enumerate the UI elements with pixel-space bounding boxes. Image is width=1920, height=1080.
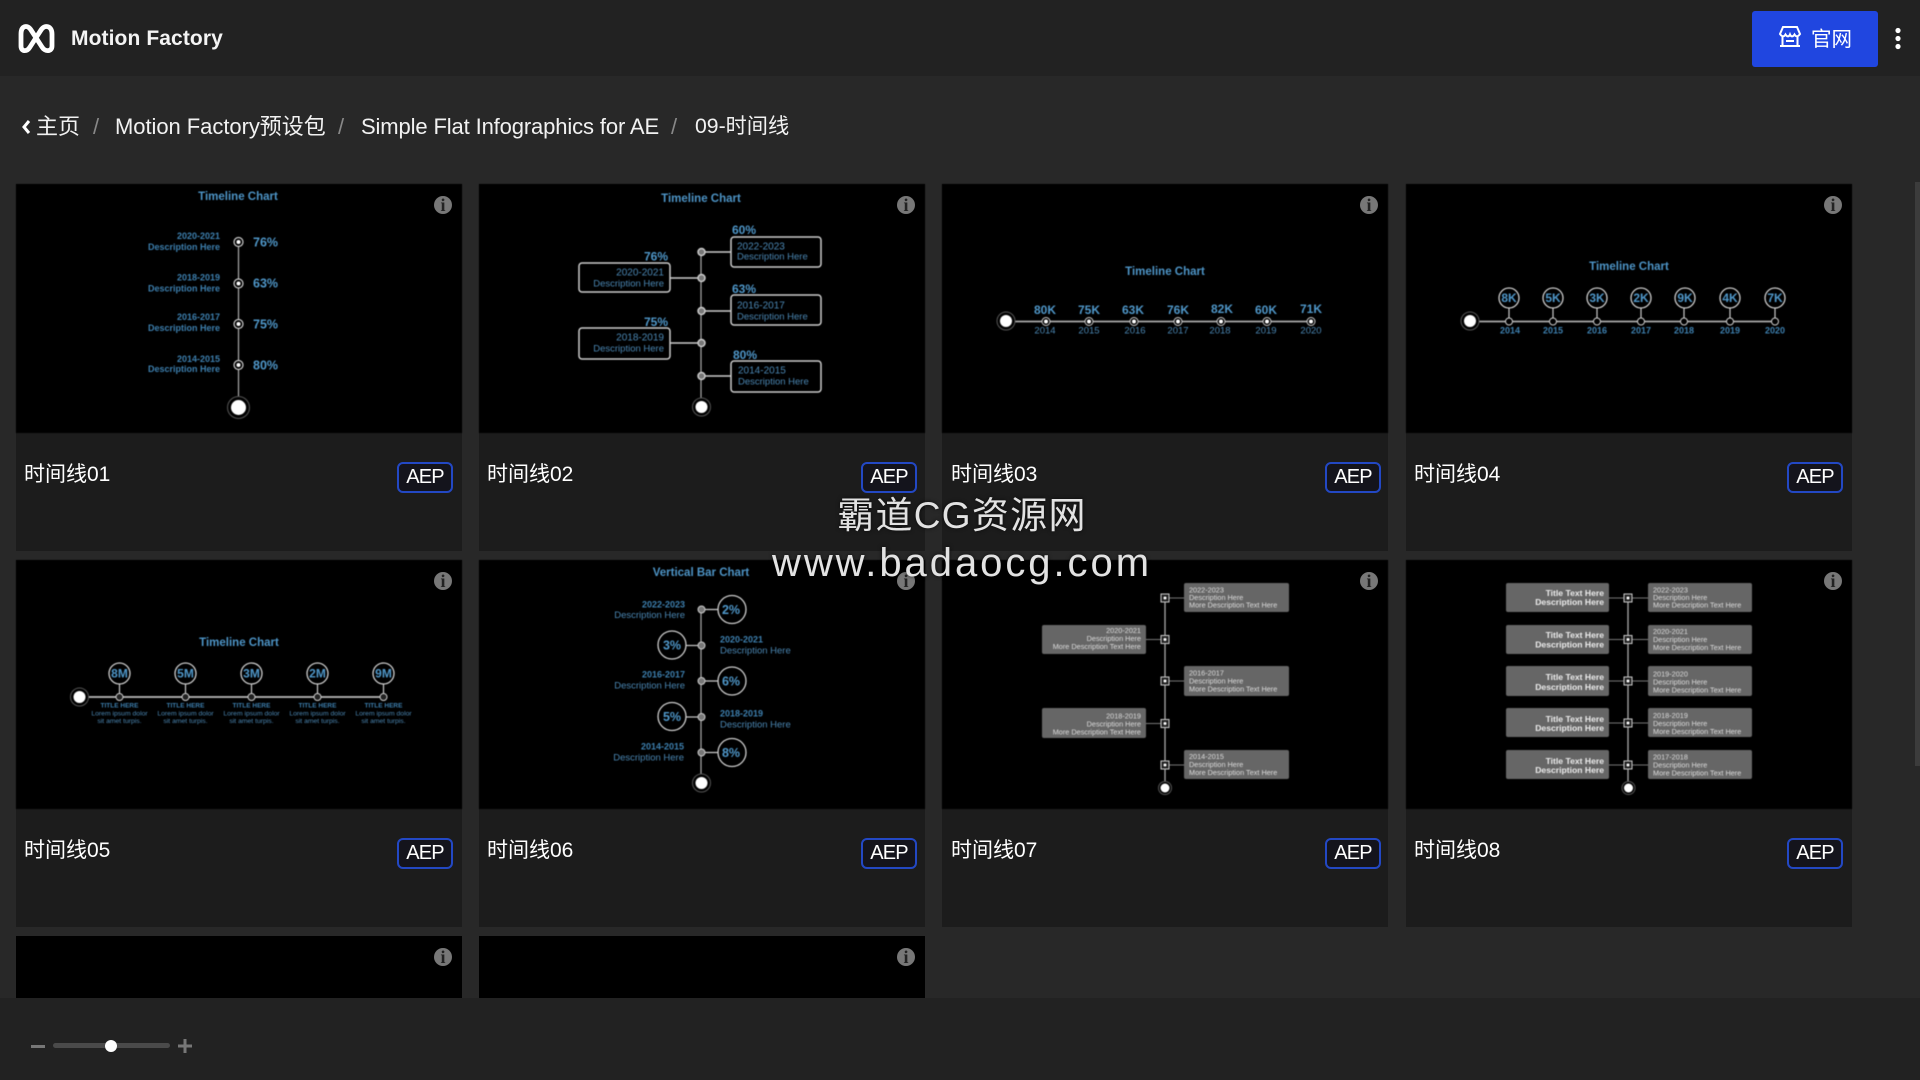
point 2015: 75K <box>1078 303 1100 317</box>
button label: 官网 <box>1811 28 1852 51</box>
watermark line: site name: 霸道CG资源网 <box>837 495 1087 536</box>
point 2016: 2016 <box>1124 326 1146 336</box>
chart title: Vertical Bar Chart <box>653 567 749 579</box>
brand name: Motion Factory <box>71 27 223 50</box>
row 2020-2021: 2020-2021 <box>1653 627 1688 636</box>
row 2020-2021: More Description Text Here <box>1653 643 1741 652</box>
entry 2020-2021: Description Here <box>148 242 220 252</box>
entry 2020-2021: Description Here <box>1087 634 1141 643</box>
icon: info <box>434 572 452 590</box>
row 2018-2019: Description Here <box>1535 723 1604 733</box>
icon: info: i <box>440 195 446 215</box>
point 2017: 2017 <box>1631 326 1651 336</box>
footer zoom bar <box>0 998 1920 1080</box>
point 2018 <box>1674 288 1695 336</box>
zoom out icon <box>31 1045 45 1048</box>
point 2014 <box>1499 288 1520 336</box>
crumb: product: Simple Flat Infographics for AE <box>361 114 659 139</box>
icon: back chevron <box>22 120 30 134</box>
end marker <box>228 396 250 418</box>
point 2019: 60K <box>1255 303 1277 317</box>
point 2019: 4K <box>1722 291 1738 305</box>
item 9M <box>355 663 412 725</box>
entry 2018-2019 <box>148 272 278 294</box>
icon: info <box>897 196 915 214</box>
entry 2014-2015 <box>1161 750 1289 779</box>
icon: info <box>434 948 452 966</box>
entry 2016-2017: 2016-2017 <box>737 300 785 312</box>
point 2015: 5K <box>1545 291 1561 305</box>
entry 2022-2023: Description Here <box>737 252 808 262</box>
item 9M: sit amet turpis. <box>361 718 406 725</box>
icon: info <box>897 948 915 966</box>
entry 2018-2019 <box>1042 708 1169 738</box>
entry 2018-2019: 63% <box>253 276 278 290</box>
entry 2016-2017: Description Here <box>737 312 808 322</box>
item 2M: TITLE HERE <box>299 702 337 710</box>
row 2019-2020 <box>1506 666 1752 696</box>
panel: timeline 06 <box>479 560 925 927</box>
card name: 时间线08 <box>1414 839 1500 862</box>
separator text: / <box>671 114 677 139</box>
AEP badge <box>861 462 917 493</box>
entry 2016-2017: More Description Text Here <box>1189 684 1277 694</box>
panel: timeline 04 <box>1406 184 1852 551</box>
row 2017-2018: Description Here <box>1653 760 1707 770</box>
entry 2014-2015: 2014-2015 <box>177 354 220 364</box>
axis line <box>1627 598 1629 784</box>
chart: grey box timeline 07 <box>942 560 1388 809</box>
zoom in icon <box>178 1039 192 1053</box>
entry 2020-2021 <box>148 231 278 252</box>
axis line <box>1006 320 1311 322</box>
entry 3%: 3% <box>663 638 681 652</box>
entry 2020-2021: 76% <box>253 236 278 250</box>
entry 2018-2019: More Description Text Here <box>1053 728 1141 736</box>
point 2017: 2K <box>1633 291 1649 305</box>
card name: 时间线07 <box>951 839 1037 862</box>
entry 2018-2019: Description Here <box>1087 720 1141 728</box>
chart title: Timeline Chart <box>1589 261 1669 273</box>
card name: 时间线01 <box>24 463 110 486</box>
row 2017-2018: More Description Text Here <box>1653 768 1741 778</box>
row 2022-2023: More Description Text Here <box>1653 600 1741 610</box>
AEP badge <box>1787 462 1843 493</box>
point 2014: 80K <box>1034 303 1056 317</box>
AEP badge <box>861 838 917 869</box>
entry 2016-2017 <box>148 312 278 333</box>
point 2020: 7K <box>1767 291 1783 305</box>
item 5M <box>157 663 214 725</box>
entry 8% <box>613 738 746 766</box>
entry 2014-2015: Description Here <box>1189 760 1243 769</box>
chart title: Timeline Chart <box>198 191 278 203</box>
row 2019-2020: Title Text Here <box>1546 672 1604 682</box>
row 2019-2020: 2019-2020 <box>1653 670 1688 678</box>
point 2018: 2018 <box>1209 326 1231 336</box>
entry 2020-2021: Description Here <box>593 278 664 290</box>
header bar <box>0 0 1920 76</box>
entry 2014-2015: Description Here <box>738 376 809 388</box>
point 2018: 82K <box>1211 302 1233 316</box>
entry 2022-2023: 2022-2023 <box>1189 586 1224 594</box>
entry 2%: 2022-2023 <box>642 600 685 610</box>
icon: info <box>1824 572 1842 590</box>
icon: info <box>1360 572 1378 590</box>
item 8M <box>91 663 148 725</box>
end marker <box>1461 312 1479 330</box>
separator text: / <box>338 114 344 139</box>
crumb: home: 主页 <box>36 114 80 139</box>
icon: info: i <box>440 571 446 591</box>
breadcrumb <box>22 114 789 139</box>
point 2017 <box>1167 303 1189 336</box>
point 2020: 2020 <box>1765 326 1785 336</box>
item 9M: 9M <box>375 666 392 680</box>
entry 2018-2019: 2018-2019 <box>1106 712 1141 720</box>
entry 2016-2017: 75% <box>253 318 278 332</box>
row 2022-2023: Title Text Here <box>1546 588 1604 598</box>
entry 2014-2015: More Description Text Here <box>1189 768 1277 777</box>
icon: info: i <box>903 195 908 215</box>
entry 5% <box>658 702 791 730</box>
panel: timeline 05 <box>16 560 462 927</box>
axis line <box>700 252 702 402</box>
icon: more menu <box>1895 28 1901 50</box>
panel: clipped card 09 <box>16 936 462 998</box>
entry 2014-2015: 2014-2015 <box>1189 752 1224 761</box>
entry 3%: 2020-2021 <box>720 634 763 644</box>
entry 2020-2021: 2020-2021 <box>616 268 664 278</box>
row 2020-2021: Title Text Here <box>1546 630 1604 640</box>
entry 2020-2021 <box>1042 625 1169 654</box>
point 2016: 2016 <box>1587 326 1607 336</box>
entry 2016-2017: 2016-2017 <box>177 312 220 322</box>
AEP badge: AEP <box>406 842 444 864</box>
panel: timeline 02 <box>479 184 925 551</box>
entry 2018-2019: Description Here <box>593 344 664 354</box>
entry 6% <box>614 667 746 695</box>
item 8M: Lorem ipsum dolor <box>91 710 148 718</box>
row 2020-2021 <box>1506 625 1752 654</box>
entry 2022-2023: Description Here <box>1189 593 1243 602</box>
item 9M: TITLE HERE <box>365 702 403 710</box>
icon: info: i <box>903 947 908 967</box>
point 2019 <box>1255 303 1277 336</box>
row 2020-2021: Description Here <box>1653 635 1707 644</box>
card name: 时间线06 <box>487 839 573 862</box>
chart title: Timeline Chart <box>661 193 741 205</box>
chart title: Timeline Chart <box>1125 266 1205 278</box>
AEP badge: AEP <box>1796 466 1834 488</box>
point 2018: 2018 <box>1674 326 1694 336</box>
item 9M: Lorem ipsum dolor <box>355 710 412 718</box>
item 8M: 8M <box>111 666 128 680</box>
point 2019: 2019 <box>1720 326 1740 336</box>
point 2020 <box>1300 302 1322 336</box>
icon: info: i <box>903 571 908 591</box>
point 2017 <box>1631 288 1651 336</box>
item 8M: sit amet turpis. <box>97 718 142 725</box>
entry 2014-2015 <box>698 348 821 392</box>
row 2018-2019: More Description Text Here <box>1653 727 1741 736</box>
entry 8%: 2014-2015 <box>641 742 684 752</box>
chart: two-sided grey box timeline 08 <box>1406 560 1852 809</box>
panel: clipped card 10 <box>479 936 925 998</box>
point 2014 <box>1034 303 1056 336</box>
slider knob <box>105 1040 117 1052</box>
icon: info: i <box>1366 195 1372 215</box>
point 2014: 2014 <box>1034 326 1056 336</box>
AEP badge: AEP <box>870 466 908 488</box>
axis line <box>79 696 383 698</box>
end marker <box>1158 782 1172 794</box>
item 5M: Lorem ipsum dolor <box>157 710 214 718</box>
item 2M: sit amet turpis. <box>295 718 340 725</box>
entry 6%: Description Here <box>614 680 685 692</box>
row 2017-2018 <box>1506 750 1752 779</box>
icon: info: i <box>1830 195 1836 215</box>
point 2015: 2015 <box>1543 326 1563 336</box>
row 2017-2018: 2017-2018 <box>1653 752 1688 762</box>
icon: Motion Factory logo <box>18 24 54 53</box>
AEP badge: AEP <box>1796 842 1834 864</box>
panel: timeline 03 <box>942 184 1388 551</box>
entry 2016-2017 <box>698 282 821 325</box>
item 2M: Lorem ipsum dolor <box>289 710 346 718</box>
point 2020 <box>1765 288 1785 336</box>
AEP badge <box>397 462 453 493</box>
entry 5%: 2018-2019 <box>720 708 763 718</box>
panel: timeline 01 <box>16 184 462 551</box>
entry 2020-2021: More Description Text Here <box>1053 642 1141 651</box>
point 2018: 9K <box>1677 291 1693 305</box>
point 2020: 71K <box>1300 302 1322 316</box>
row 2017-2018: Description Here <box>1535 765 1604 775</box>
item 5M: 5M <box>177 666 194 680</box>
item 3M: TITLE HERE <box>233 702 271 710</box>
zoom slider <box>53 1043 170 1048</box>
AEP badge <box>1787 838 1843 869</box>
entry 2016-2017 <box>1161 666 1289 696</box>
entry 8%: Description Here <box>613 752 684 764</box>
card name: 时间线05 <box>24 839 110 862</box>
row 2018-2019: Description Here <box>1653 719 1707 728</box>
entry 2016-2017: 2016-2017 <box>1189 668 1224 678</box>
point 2019: 2019 <box>1255 326 1277 336</box>
AEP badge: AEP <box>406 466 444 488</box>
item 2M: 2M <box>309 666 326 680</box>
entry 2020-2021 <box>579 250 705 292</box>
chart: horizontal bubble timeline 04 <box>1406 184 1852 433</box>
official site button <box>1752 11 1878 67</box>
point 2017: 76K <box>1167 303 1189 317</box>
point 2014: 2014 <box>1500 326 1520 336</box>
entry 2020-2021: 2020-2021 <box>1106 626 1141 635</box>
row 2022-2023: Description Here <box>1653 593 1707 602</box>
entry 2014-2015: 80% <box>733 348 757 362</box>
point 2015 <box>1543 288 1563 336</box>
icon: info: i <box>440 947 446 967</box>
row 2019-2020: More Description Text Here <box>1653 686 1741 694</box>
entry 5%: 5% <box>663 710 681 724</box>
crumb: current: 09-时间线 <box>695 115 789 138</box>
entry 2016-2017: Description Here <box>148 323 220 333</box>
watermark line: url: www.badaocg.com <box>772 541 1152 585</box>
axis line <box>700 609 702 780</box>
watermark <box>772 495 1152 585</box>
card name: 时间线04 <box>1414 463 1500 486</box>
entry 2020-2021: 76% <box>644 250 668 264</box>
item 3M: 3M <box>243 666 260 680</box>
entry 2022-2023: 2022-2023 <box>737 242 785 252</box>
entry 5%: Description Here <box>720 720 791 730</box>
end marker <box>70 688 88 706</box>
entry 2018-2019: 2018-2019 <box>177 272 220 282</box>
icon: info: i <box>1830 571 1836 591</box>
crumb: preset pack: Motion Factory预设包 <box>115 114 326 139</box>
chart title: Timeline Chart <box>199 637 279 649</box>
entry 2%: Description Here <box>614 610 685 621</box>
row 2022-2023 <box>1506 583 1752 612</box>
chart: vertical bubble timeline 06 <box>479 560 925 809</box>
row 2022-2023: Description Here <box>1535 597 1604 607</box>
entry 2014-2015: 2014-2015 <box>738 366 786 376</box>
point 2020: 2020 <box>1300 326 1322 336</box>
chart: boxed vertical timeline 02 <box>479 184 925 433</box>
AEP badge <box>1325 462 1381 493</box>
entry 2014-2015: 80% <box>253 358 278 372</box>
chart: horizontal timeline 05 <box>16 560 462 809</box>
entry 3% <box>658 631 791 659</box>
end marker <box>692 398 710 416</box>
point 2017: 2017 <box>1167 326 1189 336</box>
chart: vertical timeline 01 <box>16 184 462 433</box>
axis line <box>238 242 240 400</box>
entry 2022-2023 <box>1161 583 1289 612</box>
icon: info <box>434 196 452 214</box>
icon: info <box>897 572 915 590</box>
entry 2018-2019: 2018-2019 <box>616 332 664 344</box>
icon: store <box>1778 26 1802 47</box>
panel: timeline 07 <box>942 560 1388 927</box>
end marker <box>997 312 1015 330</box>
AEP badge <box>397 838 453 869</box>
AEP badge: AEP <box>1334 842 1372 864</box>
axis line <box>1164 598 1166 784</box>
end marker <box>1622 782 1635 794</box>
point 2019 <box>1720 288 1740 336</box>
row 2019-2020: Description Here <box>1535 682 1604 692</box>
row 2017-2018: Title Text Here <box>1546 756 1604 766</box>
entry 3%: Description Here <box>720 646 791 656</box>
item 2M <box>289 663 346 725</box>
icon: info: i <box>1366 571 1372 591</box>
entry 2018-2019: 75% <box>644 315 668 329</box>
point 2018 <box>1209 302 1233 336</box>
entry 2022-2023: 60% <box>732 223 756 237</box>
entry 2022-2023: More Description Text Here <box>1189 600 1277 610</box>
entry 6%: 6% <box>722 674 740 688</box>
entry 2016-2017: 63% <box>732 282 756 296</box>
card name: 时间线02 <box>487 463 573 486</box>
row 2019-2020: Description Here <box>1653 678 1707 686</box>
panel: timeline 08 <box>1406 560 1852 927</box>
entry 2018-2019: Description Here <box>148 284 220 294</box>
entry 2014-2015: Description Here <box>148 364 220 374</box>
point 2016 <box>1587 288 1607 336</box>
AEP badge <box>1325 838 1381 869</box>
end marker <box>692 774 710 792</box>
entry 2016-2017: Description Here <box>1189 676 1243 686</box>
entry 2%: 2% <box>722 603 740 617</box>
card name: 时间线03 <box>951 463 1037 486</box>
item 5M: TITLE HERE <box>167 702 205 710</box>
point 2015: 2015 <box>1078 326 1100 336</box>
separator text: / <box>93 114 99 139</box>
row 2020-2021: Description Here <box>1535 640 1604 650</box>
entry 2022-2023 <box>698 223 821 267</box>
axis line <box>1469 320 1775 322</box>
row 2018-2019: Title Text Here <box>1546 714 1604 724</box>
item 5M: sit amet turpis. <box>163 718 208 725</box>
scrollbar <box>1915 182 1920 766</box>
item 8M: TITLE HERE <box>101 702 139 710</box>
item 3M <box>223 663 280 725</box>
point 2016: 3K <box>1589 291 1605 305</box>
point 2016: 63K <box>1122 303 1144 317</box>
point 2015 <box>1078 303 1100 336</box>
AEP badge: AEP <box>1334 466 1372 488</box>
row 2018-2019: 2018-2019 <box>1653 711 1688 720</box>
item 3M: Lorem ipsum dolor <box>223 710 280 718</box>
entry 8%: 8% <box>722 746 740 760</box>
AEP badge: AEP <box>870 842 908 864</box>
point 2014: 8K <box>1501 291 1517 305</box>
icon: info <box>1360 196 1378 214</box>
icon: info <box>1824 196 1842 214</box>
chart: horizontal timeline 03 <box>942 184 1388 433</box>
entry 2020-2021: 2020-2021 <box>177 231 220 241</box>
row 2022-2023: 2022-2023 <box>1653 586 1688 594</box>
entry 6%: 2016-2017 <box>642 670 685 680</box>
item 3M: sit amet turpis. <box>229 718 274 725</box>
entry 2014-2015 <box>148 354 278 374</box>
entry 2018-2019 <box>579 315 705 359</box>
entry 2% <box>614 596 746 624</box>
point 2016 <box>1122 303 1146 336</box>
row 2018-2019 <box>1506 708 1752 737</box>
